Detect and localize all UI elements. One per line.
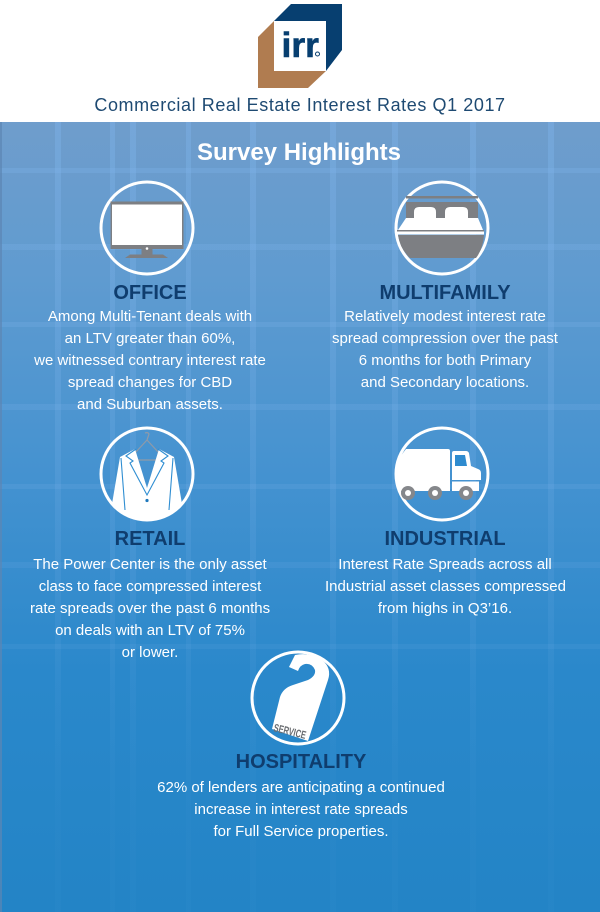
text: retail: class to face compressed interest [39, 578, 261, 595]
heading: office: OFFICE [113, 282, 187, 304]
text: multifamily: and Secondary locations. [361, 374, 529, 391]
panel: hospitality [157, 650, 445, 840]
text: hospitality [157, 779, 445, 840]
logo: IRR [258, 4, 342, 88]
text: industrial: Interest Rate Spreads across all [338, 556, 552, 573]
text: hospitality: for Full Service properties. [213, 823, 389, 840]
text: retail: on deals with an LTV of 75% [55, 622, 245, 639]
text: office: we witnessed contrary interest rate [34, 352, 266, 369]
text: office: and Suburban assets. [77, 396, 223, 413]
text: multifamily: Relatively modest interest rate [344, 308, 546, 325]
icon: door hanger [250, 650, 346, 746]
text: industrial: from highs in Q3’16. [378, 600, 512, 617]
text: hospitality: increase in interest rate spreads [194, 801, 408, 818]
icon: door hanger: SERVICE [272, 722, 307, 742]
text: retail: rate spreads over the past 6 months [30, 600, 270, 617]
icon: monitor [100, 180, 194, 276]
panel: retail [30, 426, 270, 661]
text: industrial: Industrial asset classes compressed [325, 578, 566, 595]
text: multifamily: spread compression over the past [332, 330, 558, 347]
title: Commercial Real Estate Interest Rates Q1 2017 [94, 95, 506, 115]
text: office: spread changes for CBD [68, 374, 232, 391]
text: office [34, 308, 266, 413]
icon: truck [394, 426, 490, 522]
text: industrial [325, 556, 566, 617]
text: retail: or lower. [122, 644, 178, 661]
text: office: Among Multi-Tenant deals with [48, 308, 252, 325]
logo: IRR: irr [282, 26, 319, 65]
text: multifamily [332, 308, 558, 391]
panel: office [34, 180, 266, 413]
text: retail [30, 556, 270, 661]
icon: jacket [100, 426, 194, 522]
text: office: an LTV greater than 60%, [65, 330, 235, 347]
heading: multifamily: MULTIFAMILY [379, 282, 511, 304]
heading: retail: RETAIL [115, 528, 185, 550]
text: multifamily: 6 months for both Primary [359, 352, 531, 369]
heading: industrial: INDUSTRIAL [384, 528, 506, 550]
text: hospitality: 62% of lenders are anticipating a continued [157, 779, 445, 796]
heading: Survey Highlights: Survey Highlights [197, 139, 401, 166]
heading: hospitality: HOSPITALITY [236, 751, 366, 773]
panel: industrial [325, 426, 566, 617]
text: retail: The Power Center is the only asset [33, 556, 267, 573]
icon: bed [394, 180, 490, 276]
panel: multifamily [332, 180, 558, 391]
